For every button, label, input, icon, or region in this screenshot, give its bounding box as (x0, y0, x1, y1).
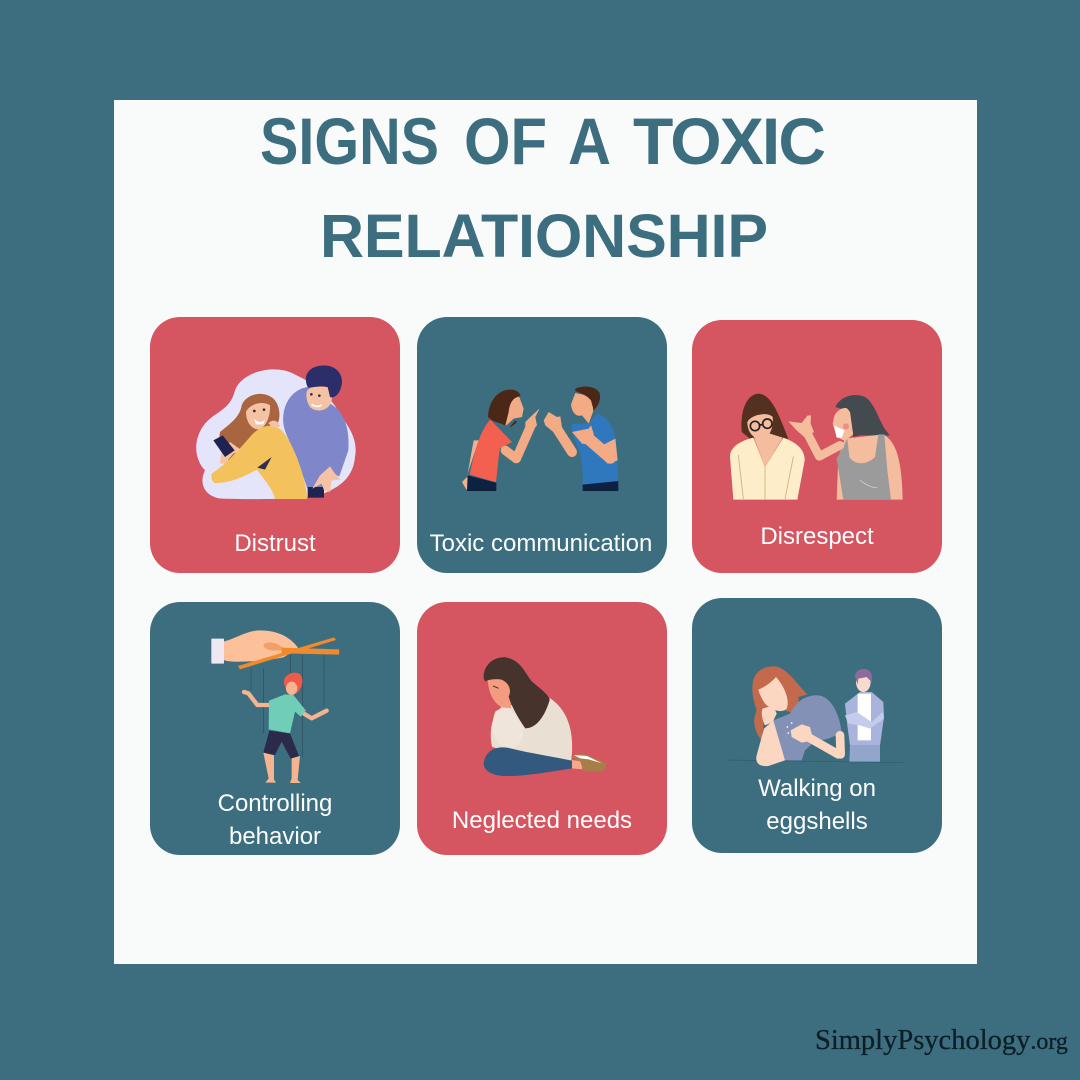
label: controlling behavior (218, 790, 332, 850)
icon: arguing couple (462, 387, 618, 491)
title (260, 104, 826, 270)
title: RELATIONSHIP (320, 202, 768, 270)
label: controlling behavior: Controlling (218, 790, 332, 817)
icon: sad woman sitting (484, 657, 607, 776)
label: toxic communication: Toxic communication (430, 530, 652, 557)
label: neglected needs: Neglected needs (452, 807, 632, 834)
title: SIGNS (260, 104, 439, 178)
label: distrust: Distrust (234, 530, 316, 557)
label: walking on eggshells: Walking on (758, 775, 876, 802)
label: walking on eggshells (758, 775, 876, 835)
icon: woman pointing at another woman (730, 394, 903, 500)
panel: toxic communication (417, 317, 667, 573)
panel: disrespect (692, 320, 942, 573)
icon: puppeteer hand and puppet (211, 630, 339, 783)
label: walking on eggshells: eggshells (766, 808, 868, 835)
title: A (568, 104, 611, 178)
label: disrespect: Disrespect (760, 523, 874, 550)
footer: source credit: SimplyPsychology.org (815, 1025, 1068, 1056)
panel: distrust (150, 317, 400, 573)
icon: suspicious couple with phone (196, 365, 356, 499)
title: OF (464, 104, 547, 178)
panel: walking on eggshells (692, 598, 942, 853)
label: controlling behavior: behavior (229, 823, 321, 850)
panel: controlling behavior (150, 602, 400, 855)
panel: neglected needs (417, 602, 667, 855)
icon: sad woman on phone with man behind (727, 666, 903, 766)
title: TOXIC (633, 104, 826, 178)
main white panel (114, 100, 977, 964)
